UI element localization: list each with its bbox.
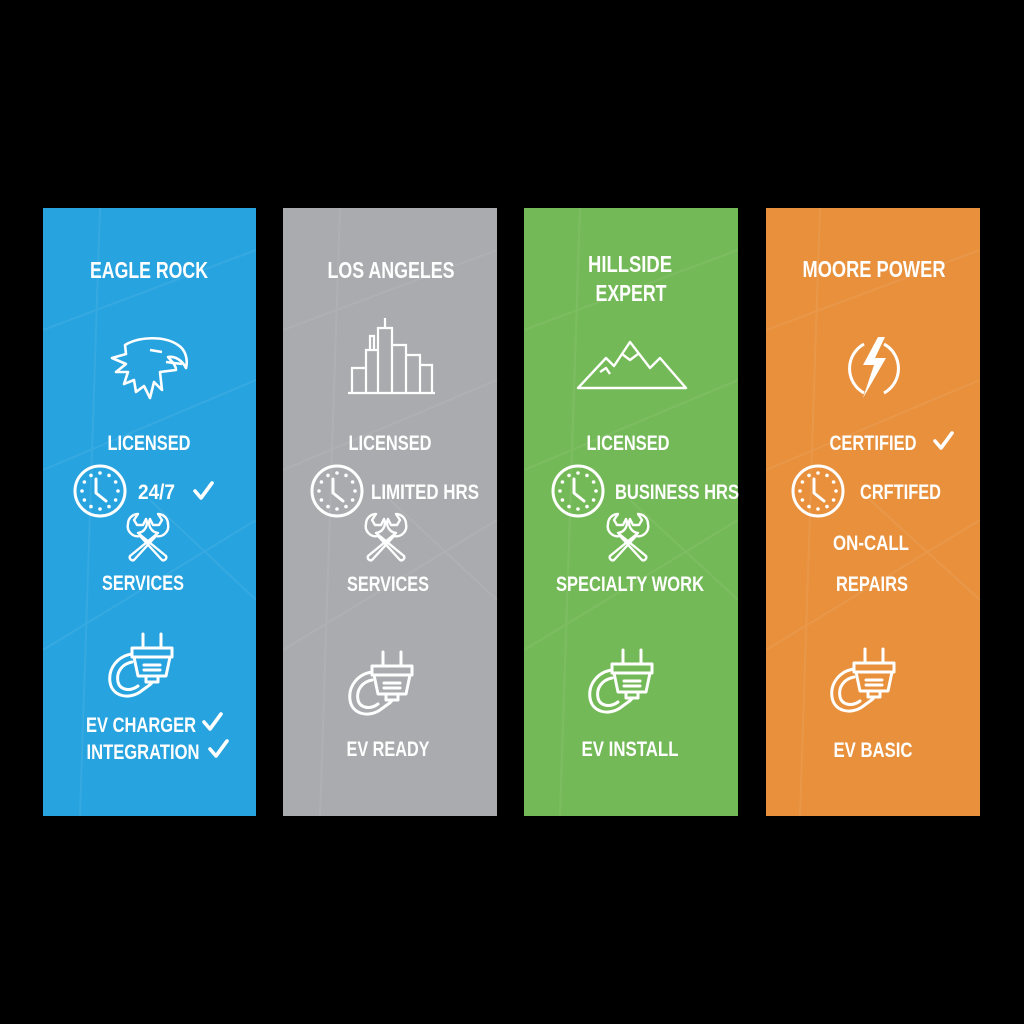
icon: eagle [112, 338, 187, 398]
text: ev ready: EV READY [346, 738, 430, 761]
text: business hrs: BUSINESS HRS [615, 481, 739, 504]
panel: Hillside Expert [524, 208, 739, 816]
text: crftifed: CRFTIFED [860, 481, 941, 504]
panel: Hillside Expert: EXPERT [596, 280, 666, 306]
text: certified: CERTIFIED [830, 432, 916, 455]
icon: mountains [578, 342, 686, 388]
icon: city skyline [348, 318, 435, 393]
text: on-call repairs: ON-CALL [833, 532, 909, 555]
text: services: SERVICES [102, 572, 184, 595]
panel: Eagle Rock [43, 208, 256, 816]
text: specialty work: SPECIALTY WORK [556, 573, 704, 596]
icon: lightning bolt [850, 337, 898, 398]
icon: clock [793, 466, 843, 516]
icon: clock [553, 466, 603, 516]
text: ev install: EV INSTALL [582, 738, 679, 761]
icon: plug [832, 649, 894, 711]
text: licensed: LICENSED [108, 432, 190, 455]
icon: check [935, 433, 952, 448]
icon: check [195, 483, 212, 498]
title: MOORE POWER [802, 256, 946, 282]
text: licensed: LICENSED [348, 432, 432, 455]
panel: Los Angeles [283, 208, 497, 816]
text: licensed: LICENSED [586, 432, 670, 455]
text: services: SERVICES [347, 573, 429, 596]
title: LOS ANGELES [328, 257, 454, 283]
icon: clock [312, 466, 362, 516]
icon: plug [110, 634, 172, 696]
title: HILLSIDE [588, 251, 672, 277]
title: EAGLE ROCK [90, 257, 208, 283]
panel: Moore Power: REPAIRS [836, 573, 908, 596]
panel: Eagle Rock: INTEGRATION [86, 741, 200, 764]
icon: wrench [366, 514, 406, 560]
text: 24/7: 24/7 [138, 481, 175, 504]
text: limited hrs: LIMITED HRS [371, 481, 479, 504]
text: ev charger integration: EV CHARGER [86, 714, 196, 737]
icon: wrench [128, 514, 168, 560]
icon: clock [75, 466, 125, 516]
text: ev basic: EV BASIC [834, 739, 912, 762]
icon: wrench [608, 514, 648, 560]
icon: plug [350, 652, 412, 714]
panel: Moore Power [766, 208, 980, 816]
icon: plug [590, 650, 652, 712]
